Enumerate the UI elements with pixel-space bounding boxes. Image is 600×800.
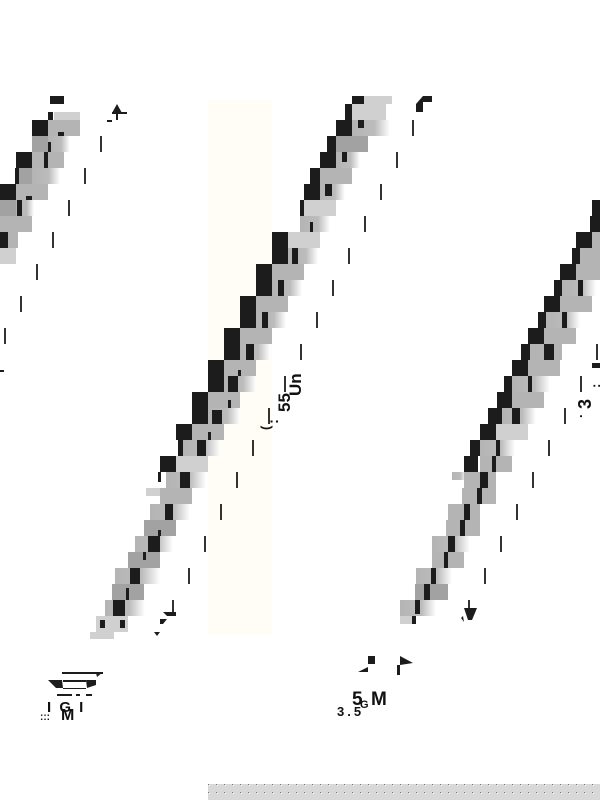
label: bottom left	[40, 699, 85, 724]
panel: cream column	[208, 100, 272, 635]
label: bottom center: M	[371, 689, 387, 710]
arrow: lower right	[461, 608, 477, 622]
rotated label: center strip	[258, 373, 305, 430]
label: bottom left: :::	[40, 712, 50, 723]
rotated label: right strip: 3	[575, 399, 595, 409]
footer band	[208, 784, 600, 800]
rotated label: center strip: 55	[275, 393, 294, 412]
label: bottom left: M	[61, 707, 74, 724]
rotated label: right strip	[570, 363, 600, 418]
label: bottom center: 3.5	[337, 704, 364, 719]
label: bottom center: 5	[352, 689, 363, 710]
rotated label: center strip: (	[258, 425, 273, 430]
photo strip: left	[0, 96, 80, 264]
rotated label: right strip: .	[570, 414, 585, 418]
tick marks: center	[172, 120, 414, 612]
photo strip: right	[400, 200, 600, 624]
label: bottom center	[337, 689, 387, 719]
arrow: lower center	[154, 612, 176, 636]
label: bottom center: G	[360, 699, 369, 711]
label: bottom left: I G I	[47, 699, 85, 716]
arrow: top center	[416, 96, 432, 112]
rotated label: center strip: :	[265, 419, 282, 424]
tick marks: left	[0, 136, 102, 372]
icon: bottom left chevrons	[48, 672, 103, 696]
photo strip: center	[90, 96, 392, 639]
tick marks: right	[468, 344, 598, 610]
icon: bottom center chevrons	[358, 656, 413, 675]
arrow: top left	[107, 104, 127, 122]
rotated label: center strip: Un	[286, 373, 305, 396]
